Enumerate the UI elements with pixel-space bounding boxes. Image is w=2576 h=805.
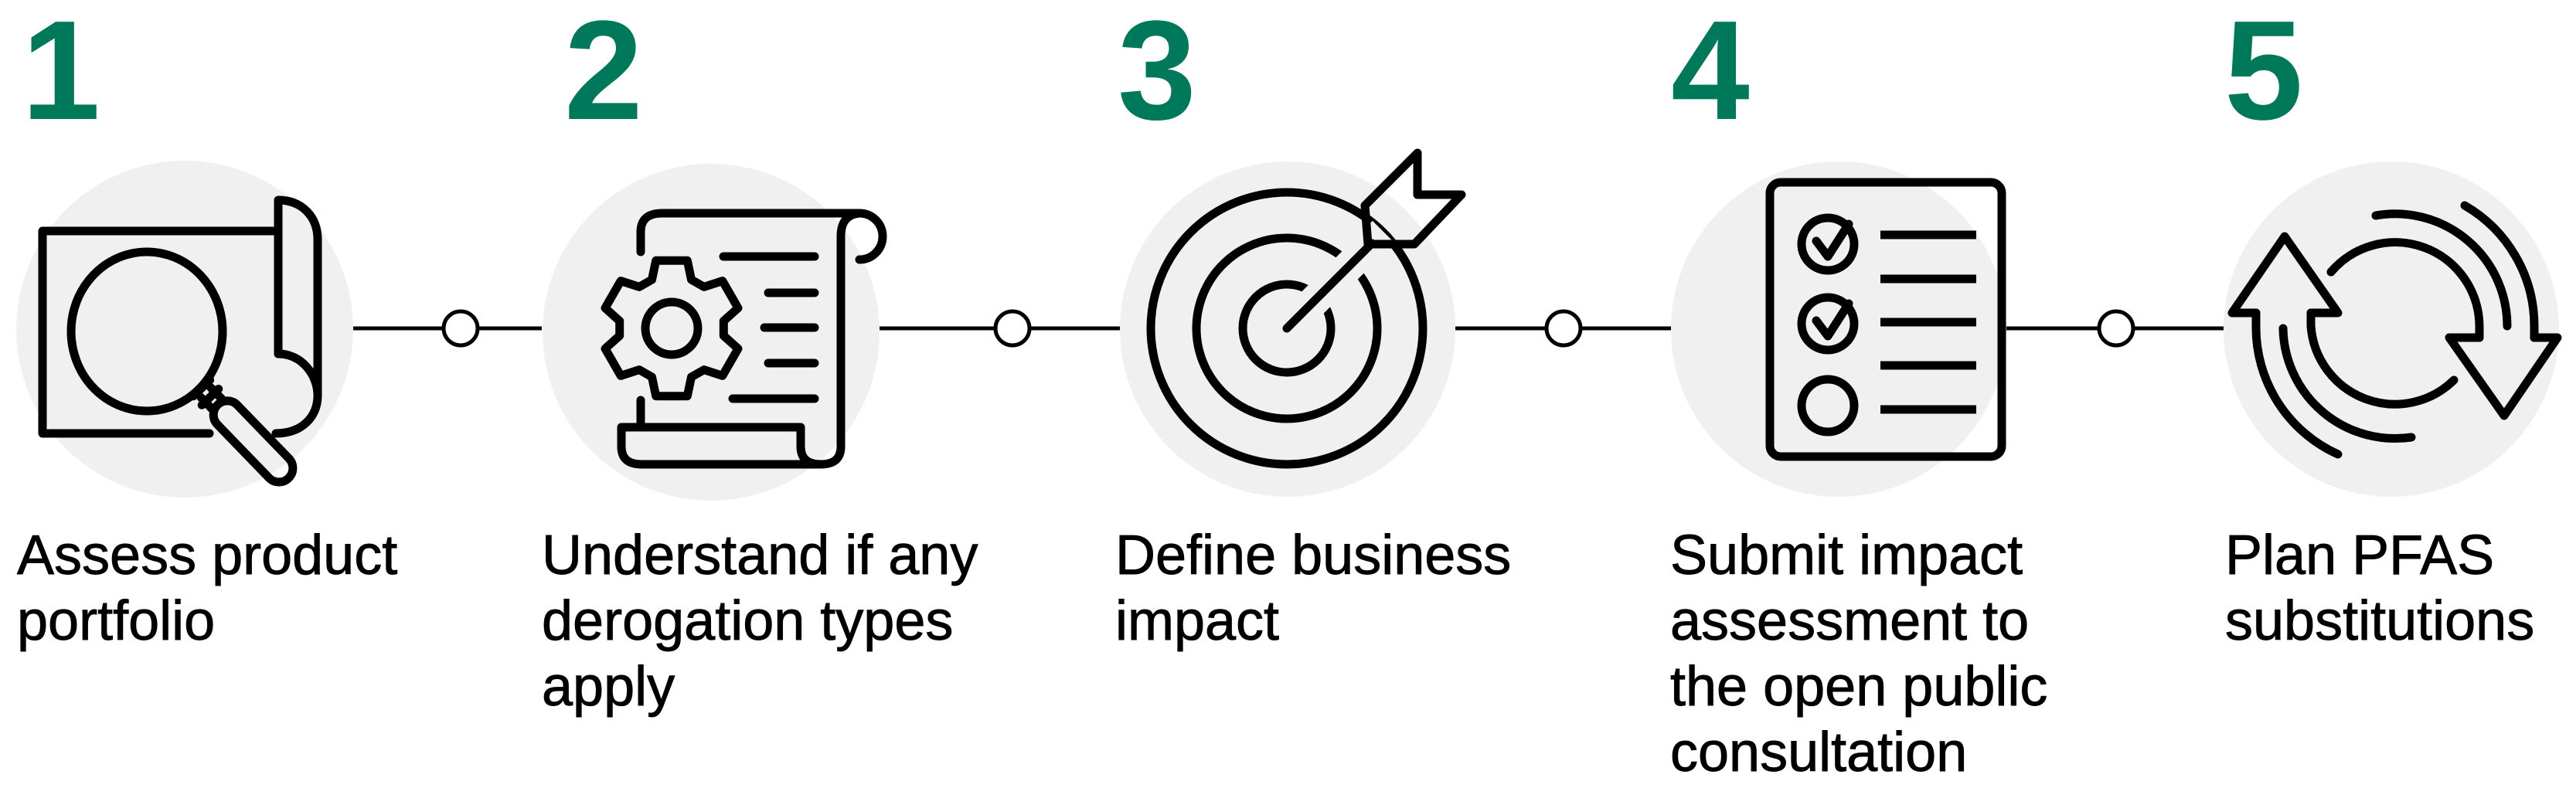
timeline connector: [353, 311, 2224, 345]
icon: checklist: [1770, 182, 2002, 457]
icon background 2: [543, 164, 880, 501]
icon: cycle arrows: [2232, 205, 2557, 454]
label 4: consultation: [1670, 722, 1967, 783]
step 5: [2224, 0, 2559, 652]
icon background 3: [1120, 161, 1455, 497]
step 2: [542, 0, 978, 718]
label 2: Understand if any: [542, 525, 978, 586]
label 5: Plan PFAS: [2225, 525, 2494, 586]
label 5: substitutions: [2225, 590, 2534, 652]
label 2: apply: [542, 656, 675, 718]
icon background 4: [1671, 161, 2006, 497]
label 4: Submit impact: [1670, 525, 2023, 586]
icon: target with arrow: [1151, 153, 1462, 464]
step 1: [16, 0, 397, 652]
label 4: the open public: [1670, 656, 2047, 718]
label 1: Assess product: [17, 525, 397, 586]
label 2: derogation types: [542, 590, 953, 652]
label 4: assessment to: [1670, 590, 2029, 652]
step 3: [1115, 0, 1511, 652]
label 3: impact: [1115, 590, 1279, 652]
icon: magnifier on document: [43, 200, 318, 487]
step 4: [1670, 0, 2047, 783]
label 1: portfolio: [17, 590, 215, 652]
icon background 5: [2224, 161, 2559, 497]
icon background 1: [16, 161, 353, 498]
icon: gear document: [605, 213, 883, 464]
label 3: Define business: [1115, 525, 1511, 586]
